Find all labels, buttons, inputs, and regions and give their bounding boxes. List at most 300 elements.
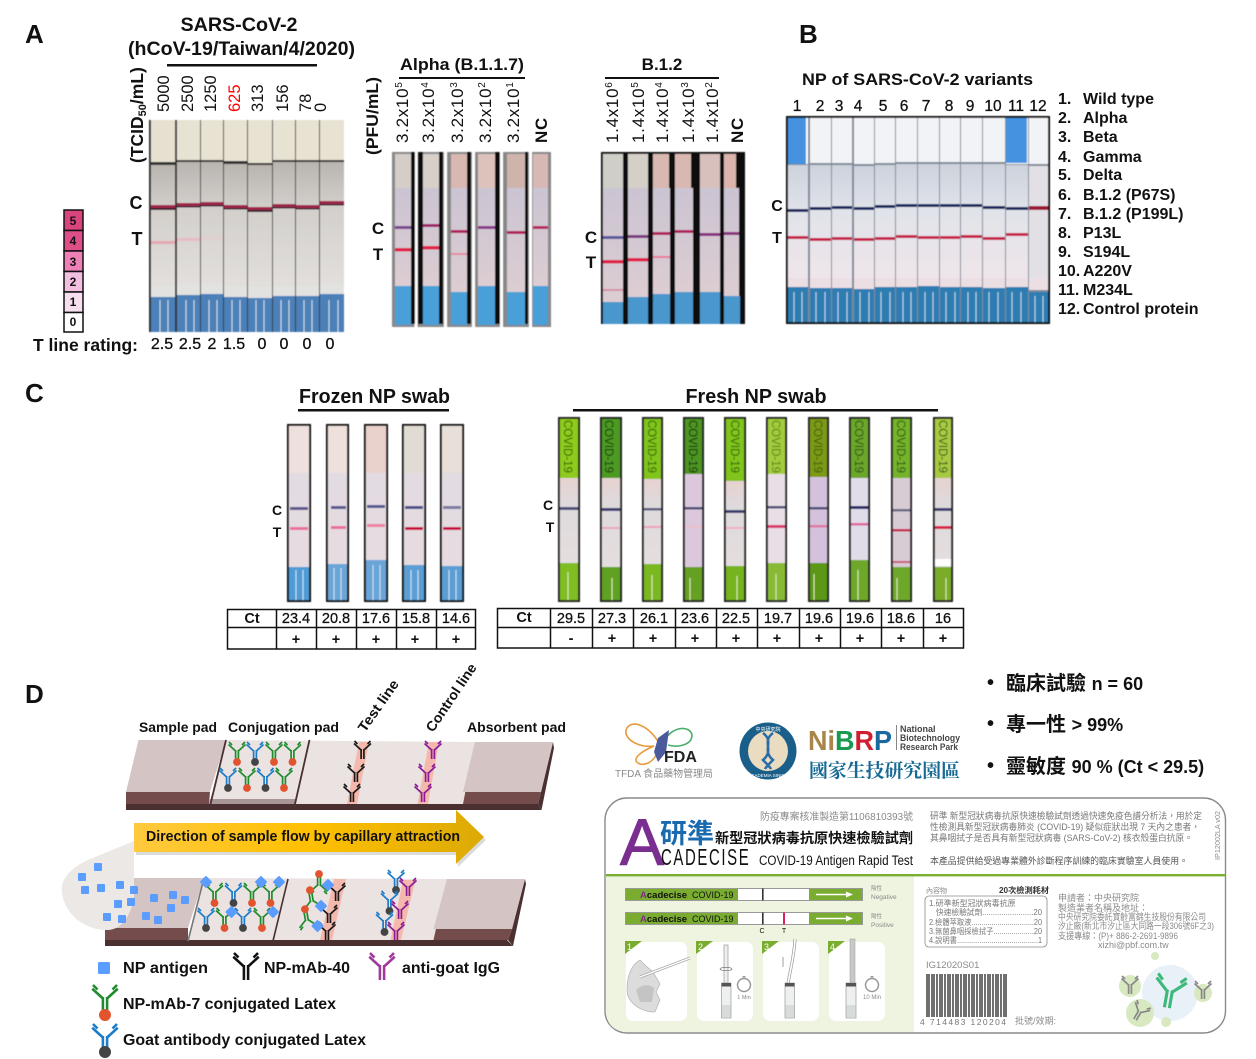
product description text bbox=[930, 810, 1202, 866]
Academia Sinica seal: ACADEMIA SINICA bbox=[748, 773, 788, 778]
lot code and barcode: IG12020S01 bbox=[926, 960, 979, 971]
fresh table: - bbox=[569, 631, 574, 647]
arrow: direction of flow bbox=[134, 810, 486, 867]
legend: NP antigen: NP antigen bbox=[123, 960, 208, 977]
B.1.2 heading: B.1.2 bbox=[642, 55, 682, 74]
panel B heading: NP of SARS-CoV-2 variants bbox=[802, 70, 1033, 89]
contents list: 20次檢測耗材 bbox=[999, 885, 1049, 895]
applicant information: 製造業者名稱及地址： bbox=[1058, 902, 1148, 913]
fresh strip 10 bbox=[933, 417, 953, 602]
concentration labels for panel A: 5000 bbox=[155, 75, 173, 112]
sample drop with NP antigen bbox=[62, 841, 189, 930]
Alpha strip 6 bbox=[533, 154, 548, 325]
C and T labels Alpha bbox=[372, 219, 384, 264]
product title block: COVID-19 Antigen Rapid Test bbox=[759, 853, 913, 868]
negative result strip: Acadecise bbox=[640, 890, 687, 901]
fresh strip 2 bbox=[600, 417, 622, 602]
B strip 9 bbox=[961, 118, 982, 322]
B.1.2 concentration labels: 1.4x10 bbox=[679, 88, 698, 143]
fresh table: + bbox=[732, 631, 740, 647]
B strip 7 bbox=[918, 118, 939, 322]
B.1.2 concentration labels: 5 bbox=[630, 81, 641, 88]
Alpha strip 4 bbox=[478, 154, 495, 325]
panel B lane numbers: 12 bbox=[1029, 98, 1047, 115]
panel letter D: D bbox=[25, 679, 44, 709]
panel A: SARS-CoV-2 heading: (hCoV-19/Taiwan/4/2020) bbox=[128, 39, 355, 60]
fresh table: 18.6 bbox=[887, 611, 915, 627]
strip 5000 bbox=[151, 120, 175, 332]
C and T labels Alpha: T bbox=[373, 245, 384, 264]
fresh strip 7: COVID-19 bbox=[811, 420, 823, 473]
variants list: Gamma bbox=[1083, 149, 1142, 166]
fresh strip 6 bbox=[766, 417, 787, 602]
fresh table: 19.6 bbox=[846, 611, 874, 627]
axis label PFU/mL: (PFU/mL) bbox=[364, 77, 382, 155]
B.1.2 strip 3 bbox=[653, 154, 670, 324]
rating scale numbers: 4 bbox=[70, 234, 77, 248]
fresh strip 5: COVID-19 bbox=[728, 420, 740, 473]
Alpha heading: Alpha (B.1.1.7) bbox=[400, 55, 524, 74]
clinical results bullets: • bbox=[987, 672, 994, 694]
contents list: 2.檢體萃取液...............................20 bbox=[929, 917, 1042, 927]
B.1.2 strip 2 bbox=[628, 154, 648, 324]
panel B lane numbers bbox=[793, 98, 1047, 115]
concentration labels for panel A: 2500 bbox=[179, 75, 197, 112]
T line rating row: 2.5 bbox=[179, 336, 201, 353]
lateral flow strip labels bbox=[139, 660, 566, 735]
lot code and barcode: 批號/效期: bbox=[1015, 1015, 1056, 1026]
lateral flow strip labels: Conjugation pad bbox=[228, 719, 339, 735]
Alpha strip 5 bbox=[507, 154, 525, 325]
positive result strip: C bbox=[759, 928, 765, 935]
fresh strip 8: COVID-19 bbox=[852, 420, 864, 473]
Alpha strip 3 bbox=[451, 154, 467, 325]
lateral flow strip labels: Sample pad bbox=[139, 719, 217, 735]
Academia Sinica seal bbox=[740, 722, 796, 780]
concentration labels for panel A: 156 bbox=[274, 84, 292, 112]
B strip 11 bbox=[1006, 118, 1028, 322]
frozen table: + bbox=[292, 632, 300, 648]
variants list: B.1.2 (P199L) bbox=[1083, 206, 1183, 223]
fresh strip 3 bbox=[642, 417, 663, 602]
conjugation pad with captured antigen bbox=[198, 876, 285, 932]
Alpha strip 1 bbox=[395, 154, 411, 325]
fresh strip 4 bbox=[683, 417, 704, 602]
panel letter C: C bbox=[25, 378, 44, 408]
frozen strip 2 bbox=[326, 424, 349, 602]
negative result strip: Negative bbox=[871, 894, 897, 901]
step 1: nasal swab bbox=[625, 941, 690, 1021]
positive result strip: Positive bbox=[871, 922, 894, 929]
control line antibodies bbox=[414, 741, 442, 802]
Alpha concentration labels: 3.2x10 bbox=[393, 88, 412, 143]
B.1.2 concentration labels: 3 bbox=[680, 81, 691, 88]
frozen strip 4 bbox=[402, 424, 426, 602]
legend: Goat antibody conjugated Latex: Goat antibody conjugated Latex bbox=[123, 1032, 366, 1049]
fresh table: 19.6 bbox=[805, 611, 833, 627]
B.1.2 strip 4 bbox=[675, 154, 693, 324]
variants list: 9. bbox=[1058, 244, 1071, 261]
lot code and barcode: 4 714483 120204 bbox=[920, 1017, 1006, 1027]
B.1.2 concentration labels: 2 bbox=[704, 81, 715, 88]
step 4: insert test strip: 10 Min bbox=[863, 995, 881, 1001]
C and T labels frozen: T bbox=[273, 524, 282, 540]
variants list: 11. bbox=[1058, 282, 1079, 299]
Alpha concentration labels: 3.2x10 bbox=[419, 88, 438, 143]
C and T labels panel B: T bbox=[772, 230, 782, 247]
Alpha concentration labels: 4 bbox=[420, 81, 431, 88]
panel B lane numbers: 7 bbox=[922, 98, 930, 115]
lot code and barcode bbox=[920, 960, 1056, 1027]
concentration labels for panel A: 1250 bbox=[202, 75, 220, 112]
product description text: 研準 新型冠狀病毒抗原快速檢驗試劑透過快速免疫色譜分析法，用於定 bbox=[930, 810, 1202, 821]
B strip 1 bbox=[788, 118, 808, 322]
panel B lane numbers: 11 bbox=[1008, 98, 1024, 115]
fresh table: 23.6 bbox=[681, 611, 709, 627]
legend: Goat antibody conjugated Latex bbox=[92, 1024, 366, 1058]
Frozen NP swab heading: Frozen NP swab bbox=[299, 386, 450, 408]
legend: NP-mAb-7 conjugated Latex bbox=[92, 985, 336, 1021]
B.1.2 concentration labels: NC bbox=[728, 117, 747, 143]
panel A: SARS-CoV-2 heading: SARS-CoV-2 bbox=[180, 14, 298, 36]
Academia Sinica seal: 中央研究院 bbox=[755, 726, 781, 733]
product title block: CADECISE bbox=[661, 845, 750, 871]
step 3: remove swab: 3 bbox=[764, 942, 769, 952]
strip 2500 bbox=[177, 120, 200, 332]
C and T labels panel A: C bbox=[130, 193, 142, 213]
panel B strips photo bbox=[786, 116, 1050, 324]
NBRP logo: Research Park bbox=[900, 742, 959, 752]
NBRP logo: NiBRP bbox=[808, 725, 892, 756]
T line rating row: T line rating: bbox=[33, 335, 138, 355]
legend: NP-mAb-7 conjugated Latex: NP-mAb-7 conjugated Latex bbox=[123, 996, 336, 1013]
T line rating row: 2 bbox=[208, 336, 217, 353]
concentration labels for panel A: 625 bbox=[226, 84, 244, 112]
variants list: Alpha bbox=[1083, 110, 1128, 127]
fresh table: 26.1 bbox=[640, 611, 668, 627]
B strip 12 bbox=[1029, 118, 1048, 322]
legend: NP-mAb-40: NP-mAb-40 bbox=[264, 960, 350, 977]
T line rating row: 2.5 bbox=[151, 336, 173, 353]
applicant information: 申請者：中央研究院 bbox=[1058, 892, 1139, 903]
frozen table: 23.4 bbox=[282, 611, 310, 627]
fresh table: + bbox=[856, 631, 864, 647]
C and T labels frozen bbox=[272, 502, 282, 540]
applicant information bbox=[1058, 892, 1214, 950]
contents list: 3.無菌鼻咽採檢拭子....................20 bbox=[929, 926, 1042, 936]
B strip 3 bbox=[832, 118, 852, 322]
fresh strip 7 bbox=[808, 417, 829, 602]
C and T labels fresh: T bbox=[546, 519, 555, 535]
fresh table: 22.5 bbox=[722, 611, 750, 627]
applicant information: 支援專線：(P)+ 886-2-2691-9896 bbox=[1058, 930, 1178, 941]
fresh table: + bbox=[939, 631, 947, 647]
Alpha strips photo bbox=[392, 152, 551, 327]
step 2: extraction tube: 2 bbox=[698, 942, 703, 952]
applicant information: xizhi@pbf.com.tw bbox=[1098, 940, 1169, 950]
concentration labels for panel A: 0 bbox=[312, 103, 330, 112]
fresh table: 19.7 bbox=[764, 611, 792, 627]
clinical results bullets: • bbox=[987, 713, 994, 735]
B strip 5 bbox=[875, 118, 895, 322]
Alpha strip 2 bbox=[423, 154, 439, 325]
C and T labels fresh bbox=[543, 497, 555, 535]
rating scale numbers: 2 bbox=[70, 275, 77, 289]
concentration labels for panel A: 313 bbox=[249, 84, 267, 112]
variants list: 8. bbox=[1058, 225, 1071, 242]
control line complex bbox=[376, 870, 416, 940]
fresh strips bbox=[558, 417, 953, 602]
fresh table: + bbox=[691, 631, 699, 647]
B strip 6 bbox=[896, 118, 917, 322]
contents list: 內容物 bbox=[926, 886, 947, 895]
Alpha concentration labels: 5 bbox=[394, 81, 405, 88]
strip 0 bbox=[320, 120, 344, 332]
positive result strip: 陽性 bbox=[871, 912, 883, 920]
frozen table bbox=[227, 609, 476, 649]
panel B lane numbers: 5 bbox=[879, 98, 887, 115]
B strip 2 bbox=[810, 118, 831, 322]
variants list: M234L bbox=[1083, 282, 1133, 299]
product title block bbox=[620, 805, 913, 879]
legend: anti-goat IgG: anti-goat IgG bbox=[402, 960, 500, 977]
fresh strip 10: COVID-19 bbox=[936, 420, 948, 473]
Alpha concentration labels bbox=[393, 81, 551, 143]
C and T labels panel B bbox=[771, 198, 783, 247]
variants list: 12. bbox=[1058, 301, 1080, 318]
B strip 10 bbox=[983, 118, 1005, 322]
variants list: Control protein bbox=[1083, 301, 1199, 318]
B.1.2 strips photo bbox=[601, 152, 745, 324]
C and T labels B.1.2: T bbox=[586, 253, 597, 272]
B.1.2 strip 6 bbox=[724, 154, 740, 324]
fresh table: + bbox=[608, 631, 616, 647]
fresh strip 9: COVID-19 bbox=[894, 420, 906, 473]
variants list: A220V bbox=[1083, 263, 1132, 280]
panel A strip photo bbox=[149, 120, 344, 332]
clinical results bullets bbox=[987, 671, 1204, 778]
legend: anti-goat IgG bbox=[369, 953, 500, 980]
C and T labels frozen: C bbox=[272, 502, 282, 518]
strip 625 bbox=[224, 120, 247, 332]
TFDA logo: FDA bbox=[664, 749, 697, 766]
B.1.2 strip 1 bbox=[603, 154, 623, 324]
fresh strip 4: COVID-19 bbox=[686, 420, 698, 473]
product description text: 本產品提供給受過專業體外診斷程序訓練的臨床實驗室人員使用。 bbox=[930, 855, 1188, 866]
legend: NP-mAb-40 bbox=[233, 953, 350, 980]
panel letter A: A bbox=[25, 19, 44, 49]
product description text: 其鼻咽拭子是否具有新型冠狀病毒 (SARS-CoV-2) 核衣殼蛋白抗原。 bbox=[930, 832, 1193, 843]
TFDA logo: TFDA 食品藥物管理局 bbox=[615, 767, 713, 780]
B strip 8 bbox=[940, 118, 960, 322]
frozen table: 20.8 bbox=[322, 611, 350, 627]
product title block: 防疫專案核准製造第1106810393號 bbox=[760, 810, 913, 823]
clinical results bullets: • bbox=[987, 755, 994, 777]
positive result strip bbox=[625, 912, 894, 935]
B.1.2 concentration labels: 4 bbox=[654, 81, 665, 88]
concentration labels for panel A bbox=[155, 75, 330, 112]
T line rating row: 0 bbox=[303, 336, 312, 353]
variants list bbox=[1058, 91, 1199, 318]
C and T labels B.1.2 bbox=[585, 228, 597, 272]
B strip 4 bbox=[854, 118, 874, 322]
antibody illustration bbox=[1119, 952, 1212, 1027]
fresh table: + bbox=[897, 631, 905, 647]
rating scale numbers: 1 bbox=[70, 295, 77, 309]
B.1.2 concentration labels: 1.4x10 bbox=[703, 88, 722, 143]
product title block: 研準 bbox=[660, 819, 714, 849]
NBRP logo bbox=[808, 724, 960, 782]
rating scale numbers: 3 bbox=[70, 255, 77, 269]
frozen table: 15.8 bbox=[402, 611, 430, 627]
TFDA logo bbox=[615, 724, 713, 780]
panel B lane numbers: 2 bbox=[816, 98, 824, 115]
Alpha concentration labels: 3.2x10 bbox=[504, 88, 523, 143]
fresh table: + bbox=[815, 631, 823, 647]
frozen table: + bbox=[411, 632, 419, 648]
step 2: extraction tube: 1 Min bbox=[737, 995, 751, 1001]
NBRP logo: Biotechnology bbox=[900, 733, 960, 743]
fresh strip 5 bbox=[724, 417, 746, 602]
Alpha concentration labels: 3.2x10 bbox=[448, 88, 467, 143]
fresh table bbox=[497, 608, 964, 648]
B.1.2 strip 5 bbox=[700, 154, 720, 324]
clinical results bullets: 靈敏度 90 % (Ct < 29.5) bbox=[1006, 755, 1204, 778]
strip 1250 bbox=[201, 120, 223, 332]
C and T labels Alpha: C bbox=[372, 219, 384, 238]
fresh table: + bbox=[773, 631, 781, 647]
fresh strip 1 bbox=[558, 417, 580, 602]
frozen table: + bbox=[452, 632, 460, 648]
frozen table: Ct bbox=[244, 611, 260, 627]
product box label bbox=[605, 798, 1226, 1033]
variants list: 5. bbox=[1058, 167, 1071, 184]
frozen table: 17.6 bbox=[362, 611, 390, 627]
frozen strips bbox=[287, 424, 464, 602]
T line rating colour scale bbox=[64, 210, 83, 332]
panel B lane numbers: 3 bbox=[835, 98, 843, 115]
Alpha concentration labels: NC bbox=[532, 117, 551, 143]
positive result strip: Acadecise bbox=[640, 914, 687, 925]
product title block: A bbox=[620, 805, 664, 879]
negative result strip bbox=[625, 884, 897, 901]
variants list: Wild type bbox=[1083, 91, 1154, 108]
fresh table: Ct bbox=[516, 610, 532, 626]
C and T labels panel A: T bbox=[132, 229, 142, 249]
C and T labels panel B: C bbox=[771, 198, 783, 215]
frozen table: + bbox=[332, 632, 340, 648]
variants list: 10. bbox=[1058, 263, 1080, 280]
fresh strip 8 bbox=[849, 417, 870, 602]
conjugated latex antibodies bbox=[220, 742, 301, 792]
fresh table: 16 bbox=[935, 611, 951, 627]
panel B lane numbers: 8 bbox=[945, 98, 953, 115]
frozen strip 1 bbox=[287, 424, 311, 602]
frozen table: + bbox=[372, 632, 380, 648]
product description text: 性檢測具新型冠狀病毒肺炎 (COVID-19) 疑似症狀出現 7 天內之患者， bbox=[930, 821, 1200, 832]
fresh table: + bbox=[649, 631, 657, 647]
fresh strip 9 bbox=[891, 417, 912, 602]
B.1.2 heading bbox=[605, 55, 719, 79]
concentration labels for panel A: 78 bbox=[297, 94, 315, 112]
C and T labels fresh: C bbox=[543, 497, 553, 513]
positive result strip: T bbox=[782, 928, 787, 935]
variants list: P13L bbox=[1083, 225, 1121, 242]
Alpha concentration labels: 1 bbox=[505, 81, 516, 88]
strip 156 bbox=[273, 120, 295, 332]
contents list bbox=[925, 885, 1049, 947]
B.1.2 concentration labels: 1.4x10 bbox=[629, 88, 648, 143]
top lateral flow strip bbox=[126, 740, 554, 810]
panel A: SARS-CoV-2 heading bbox=[128, 14, 355, 66]
variants list: Delta bbox=[1083, 167, 1122, 184]
fresh table: 27.3 bbox=[598, 611, 626, 627]
axis label TCID50/mL: (TCID bbox=[127, 116, 147, 163]
step 4: insert test strip bbox=[828, 939, 885, 1021]
variants list: Beta bbox=[1083, 129, 1118, 146]
fresh strip 1: COVID-19 bbox=[561, 420, 573, 473]
panel B lane numbers: 10 bbox=[984, 98, 1002, 115]
clinical results bullets: 專一性 > 99% bbox=[1006, 713, 1123, 736]
rating scale numbers: 5 bbox=[70, 214, 77, 228]
variants list: 3. bbox=[1058, 129, 1071, 146]
T line rating row: 1.5 bbox=[223, 336, 245, 353]
applicant information: 中央研究院委託寶齡富錦生技股份有限公司 bbox=[1058, 911, 1206, 922]
frozen strip 5 bbox=[440, 424, 464, 602]
fresh strip 3: COVID-19 bbox=[645, 420, 657, 473]
rating scale numbers: 0 bbox=[70, 315, 77, 329]
variants list: 6. bbox=[1058, 187, 1071, 204]
frozen table: 14.6 bbox=[442, 611, 470, 627]
rating scale numbers bbox=[70, 214, 77, 329]
T line rating row: 0 bbox=[326, 336, 335, 353]
strip 78 bbox=[296, 120, 319, 332]
version code: IP12002LA v02 bbox=[1215, 811, 1222, 860]
variants list: 7. bbox=[1058, 206, 1071, 223]
lateral flow strip labels: Test line bbox=[354, 676, 402, 735]
contents list: 快速檢驗試劑........................20 bbox=[936, 907, 1043, 917]
panel B lane numbers: 1 bbox=[793, 98, 801, 115]
variants list: S194L bbox=[1083, 244, 1130, 261]
Alpha concentration labels: 2 bbox=[477, 81, 488, 88]
C and T labels B.1.2: C bbox=[585, 228, 597, 247]
frozen strip 3 bbox=[364, 424, 388, 602]
B.1.2 concentration labels: 6 bbox=[604, 81, 615, 88]
clinical results bullets: 臨床試驗 n = 60 bbox=[1006, 671, 1143, 695]
B.1.2 concentration labels: 1.4x10 bbox=[653, 88, 672, 143]
Alpha concentration labels: 3 bbox=[449, 81, 460, 88]
product title block: 新型冠狀病毒抗原快速檢驗試劑 bbox=[715, 830, 913, 846]
B.1.2 concentration labels: 1.4x10 bbox=[603, 88, 622, 143]
T line rating row: 0 bbox=[258, 336, 267, 353]
lateral flow strip labels: Control line bbox=[422, 660, 480, 735]
Fresh NP swab heading: Fresh NP swab bbox=[686, 386, 826, 408]
negative result strip: 陰性 bbox=[871, 884, 883, 892]
positive result strip: COVID-19 bbox=[692, 914, 734, 924]
lateral flow strip labels: Absorbent pad bbox=[467, 719, 566, 735]
variants list: 1. bbox=[1058, 91, 1071, 108]
panel B lane numbers: 9 bbox=[966, 98, 974, 115]
strip 313 bbox=[248, 120, 272, 332]
step 2: extraction tube bbox=[696, 941, 753, 1021]
panel B lane numbers: 4 bbox=[854, 98, 863, 115]
contents list: 1.研準新型冠狀病毒抗原 bbox=[929, 898, 1016, 908]
fresh strip 6: COVID-19 bbox=[769, 420, 781, 473]
panel letter B: B bbox=[799, 19, 818, 49]
step 1: nasal swab: 1 bbox=[627, 942, 632, 952]
T line rating row bbox=[33, 335, 335, 355]
NBRP logo: National bbox=[900, 724, 936, 734]
